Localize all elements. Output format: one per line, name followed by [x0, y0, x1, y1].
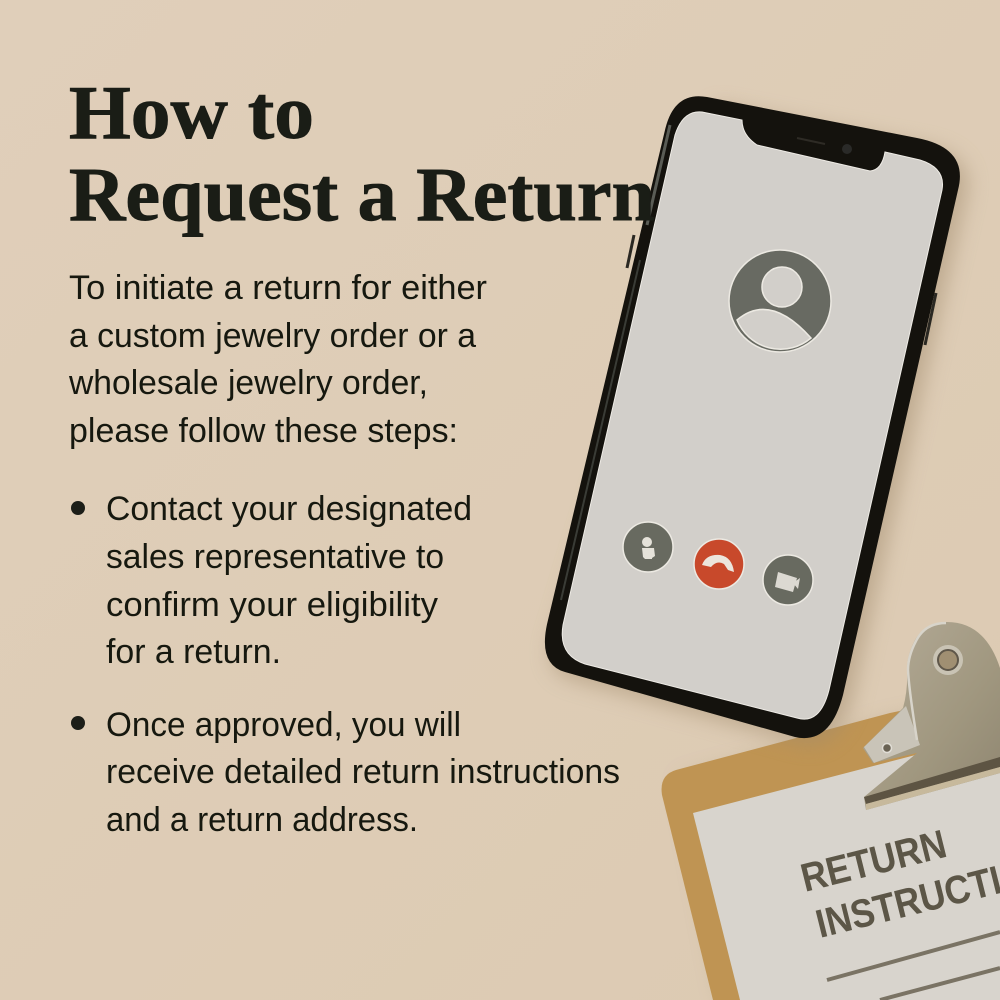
- handset glyph: [702, 555, 734, 572]
- bullet dot: [71, 501, 85, 515]
- avatar circle: [729, 250, 831, 352]
- title: [69, 71, 655, 237]
- phone side buttons: [627, 235, 936, 345]
- clipboard: [662, 622, 1000, 1000]
- avatar shoulders: [737, 309, 811, 349]
- end call button: [694, 539, 744, 589]
- avatar head: [762, 267, 802, 307]
- clip body: [863, 622, 1000, 810]
- camera glyph: [775, 572, 800, 592]
- clipboard title: RETURN: [797, 822, 951, 901]
- intro text: a custom jewelry order or a: [69, 317, 476, 355]
- bullet 1 text: Contact your designated: [106, 490, 472, 528]
- phone: [545, 96, 968, 745]
- intro text: wholesale jewelry order,: [68, 364, 428, 402]
- bullet 2 text: receive detailed return instructions: [106, 753, 620, 791]
- metal clip: [863, 622, 1000, 810]
- avatar: [729, 250, 831, 352]
- bullet 2 text: Once approved, you will: [106, 706, 461, 744]
- clipboard shadow: [680, 700, 1000, 1000]
- clipboard board: [662, 690, 1000, 1000]
- intro text: [68, 269, 487, 450]
- phone speaker: [797, 138, 825, 144]
- clip rivet: [882, 744, 892, 752]
- phone body: [545, 96, 960, 738]
- bullet 1 text: [106, 490, 472, 671]
- phone shadow: [551, 105, 968, 745]
- title: Request a Return: [69, 153, 655, 237]
- intro text: please follow these steps:: [69, 412, 458, 450]
- bullet 1: [71, 490, 472, 671]
- video button: [763, 555, 813, 605]
- bullet 1 text: confirm your eligibility: [106, 586, 438, 624]
- bullet 2: [71, 706, 620, 839]
- clipboard lines: [827, 932, 1000, 1000]
- clip left highlight: [864, 706, 920, 763]
- phone camera: [842, 144, 852, 154]
- clip hole: [933, 645, 963, 675]
- bullet 1 text: sales representative to: [106, 538, 444, 576]
- bullet dot: [71, 716, 85, 730]
- phone side highlight: [647, 125, 670, 225]
- call buttons: [623, 522, 813, 605]
- clipboard paper: [693, 733, 1000, 1000]
- phone screen: [562, 112, 943, 719]
- title: How to: [69, 71, 314, 155]
- clip loop highlight: [908, 623, 946, 740]
- mute button: [623, 522, 673, 572]
- bullet 1 text: for a return.: [106, 633, 281, 671]
- intro text: To initiate a return for either: [69, 269, 487, 307]
- clip lower edge: [864, 757, 1000, 804]
- mute glyph: [642, 537, 655, 559]
- bullet 2 text: and a return address.: [106, 801, 418, 839]
- bullet 2 text: [106, 706, 620, 839]
